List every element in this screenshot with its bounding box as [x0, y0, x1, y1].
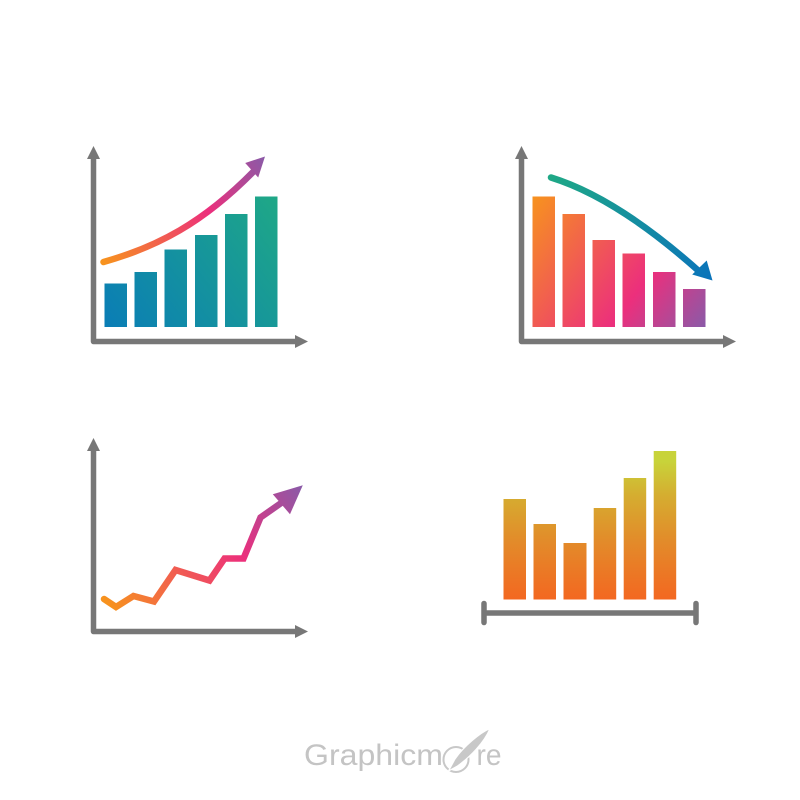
bars	[504, 451, 676, 600]
chart: rising bars with curved arrow	[87, 146, 308, 348]
logo letter o with pen icon	[444, 728, 490, 772]
axes	[87, 146, 308, 348]
logo wordmark: Graphicm	[304, 739, 443, 772]
axes	[87, 438, 308, 638]
rising curved arrow	[104, 156, 265, 262]
logo: Graphicmore	[304, 728, 502, 772]
axes	[515, 146, 736, 348]
chart: falling bars with curved arrow	[515, 146, 736, 348]
zigzag arrow line	[104, 485, 303, 607]
bars	[104, 196, 278, 327]
logo ending: re	[476, 739, 502, 772]
bars	[532, 196, 706, 327]
chart: zigzag line with arrow	[87, 438, 308, 638]
baseline with end caps	[484, 604, 696, 622]
falling curved arrow	[551, 178, 712, 280]
chart: orange and yellow bars on baseline	[484, 451, 696, 622]
